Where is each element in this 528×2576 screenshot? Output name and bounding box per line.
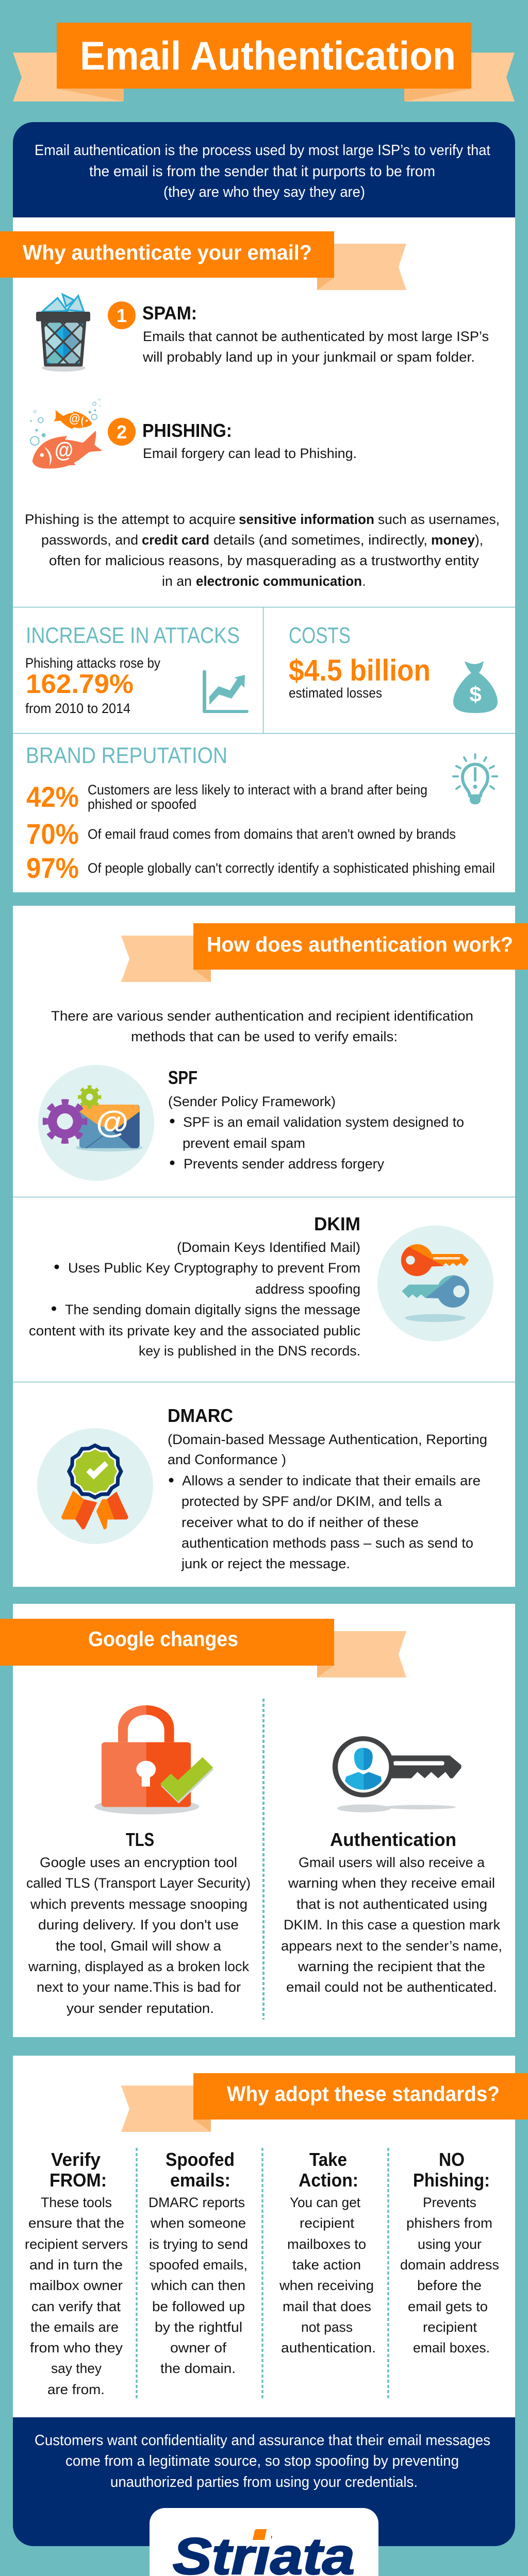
column: no phishing: phishers from bbox=[406, 2215, 492, 2231]
item: phishing bbox=[108, 418, 357, 461]
column: spoofed emails: Spoofed bbox=[166, 2149, 235, 2170]
stat: increase in attacks: 162.79% bbox=[26, 669, 134, 699]
panel: how does authentication work bbox=[13, 906, 528, 1587]
column: no phishing: Phishing: bbox=[413, 2170, 490, 2191]
item: spam: Emails that cannot be authenticated by most large ISP’s bbox=[143, 329, 489, 344]
block: SPF: (Sender Policy Framework) bbox=[168, 1094, 336, 1109]
footer banner with website bbox=[13, 2508, 515, 2576]
block: SPF: SPF is an email validation system designed to bbox=[183, 1114, 464, 1130]
stat: 97 percent bbox=[26, 852, 495, 884]
text: phishing explanation: details (and sometimes, indirectly, bbox=[213, 532, 427, 548]
item: spam: 1 bbox=[117, 305, 127, 326]
block: DKIM: content with its private key and the associated public bbox=[29, 1323, 360, 1338]
panel: why adopt these standards bbox=[13, 2056, 528, 2417]
item: phishing: PHISHING: bbox=[142, 420, 232, 441]
icon: trash bin bbox=[36, 293, 90, 372]
panel: why authenticate your email bbox=[0, 217, 515, 892]
block: Authentication: Authentication bbox=[330, 1829, 456, 1850]
column: verify from: mailbox owner bbox=[29, 2278, 123, 2293]
stat: increase in attacks: Phishing attacks rose by bbox=[25, 655, 160, 671]
block: Authentication: Gmail users will also receive a bbox=[299, 1855, 485, 1870]
text: phishing explanation: often for malicious reasons, by masquerading as a trustworthy entity bbox=[49, 553, 479, 568]
column: verify from: Verify bbox=[51, 2149, 101, 2170]
column: spoofed emails: which can then bbox=[151, 2278, 245, 2293]
block: Authentication: that is not authenticated using bbox=[296, 1896, 487, 1912]
heading: google changes: Google changes bbox=[88, 1627, 238, 1651]
column: take action: authentication. bbox=[281, 2340, 376, 2355]
block: DMARC: protected by SPF and/or DKIM, and tells a bbox=[182, 1494, 442, 1509]
block: DMARC: junk or reject the message. bbox=[181, 1556, 350, 1571]
block: DKIM: address spoofing bbox=[255, 1281, 360, 1297]
column: take action: when receiving bbox=[279, 2278, 374, 2293]
column: take action: Take bbox=[309, 2149, 347, 2170]
heading: how does authentication work bbox=[121, 923, 528, 982]
column: verify from: say they bbox=[51, 2361, 102, 2376]
heading: why authenticate: Why authenticate your email? bbox=[23, 241, 312, 264]
icon: phishing fish bbox=[30, 399, 102, 468]
stat: 97 percent: Of people globally can't correctly identify a sophisticated phishing email bbox=[88, 860, 495, 876]
text: phishing explanation: such as usernames, bbox=[378, 512, 500, 527]
stat: costs bbox=[289, 623, 431, 701]
block: Authentication: email could not be authenticated. bbox=[286, 1979, 497, 1995]
block: Authentication: appears next to the sender’s name, bbox=[281, 1938, 502, 1954]
block: DMARC bbox=[168, 1405, 487, 1571]
panel: closing statement bbox=[13, 2417, 515, 2546]
stat: costs: COSTS bbox=[289, 623, 351, 648]
column: verify from: recipient servers bbox=[25, 2236, 128, 2252]
stat: 42 percent: phished or spoofed bbox=[88, 796, 196, 812]
stat: increase in attacks: from 2010 to 2014 bbox=[25, 701, 130, 716]
panel: closing statement: Customers want confidentiality and assurance that their email messages bbox=[35, 2432, 490, 2449]
panel: closing statement: unauthorized parties from using your credentials. bbox=[110, 2474, 418, 2490]
panel: intro definition: Email authentication is the process used by most large ISP’s to verify that bbox=[35, 142, 490, 159]
block: TLS: called TLS (Transport Layer Security) bbox=[26, 1875, 251, 1891]
heading: google changes bbox=[0, 1619, 406, 1677]
block: DMARC: DMARC bbox=[168, 1405, 233, 1426]
column: spoofed emails: owner of bbox=[170, 2340, 227, 2355]
column: spoofed emails: by the rightful bbox=[155, 2319, 242, 2335]
block: DKIM: Uses Public Key Cryptography to prevent From bbox=[68, 1260, 360, 1276]
block: DKIM bbox=[29, 1213, 360, 1359]
icon: padlock with check bbox=[94, 1705, 213, 1815]
text: methods intro bbox=[51, 1008, 473, 1044]
column: no phishing: NO bbox=[439, 2149, 465, 2170]
icon: money bag bbox=[453, 661, 498, 713]
block: SPF bbox=[168, 1067, 464, 1172]
icon: envelope with gears bbox=[38, 1065, 154, 1181]
block: SPF: SPF bbox=[168, 1067, 197, 1088]
column: spoofed emails: emails: bbox=[170, 2170, 230, 2191]
stat: 97 percent: 97% bbox=[26, 852, 79, 884]
block: Authentication: warning when they receive email bbox=[288, 1875, 495, 1891]
text: phishing explanation: passwords, and bbox=[41, 532, 138, 548]
column: spoofed emails: spoofed emails, bbox=[149, 2257, 248, 2273]
block: DKIM: (Domain Keys Identified Mail) bbox=[177, 1240, 360, 1255]
stat: 42 percent: Customers are less likely to interact with a brand after being bbox=[88, 782, 427, 798]
column: spoofed emails: when someone bbox=[150, 2215, 246, 2231]
icon: lightbulb bbox=[453, 754, 497, 804]
column: take action: recipient bbox=[300, 2215, 355, 2231]
icon: phishing fish: @ bbox=[55, 437, 73, 462]
item: phishing: 2 bbox=[117, 421, 127, 443]
text: phishing explanation bbox=[25, 512, 500, 589]
stat: costs: $4.5 billion bbox=[289, 654, 431, 687]
column: verify from: ensure that the bbox=[28, 2215, 124, 2231]
text: phishing explanation: ), bbox=[475, 532, 483, 548]
panel: intro definition bbox=[13, 122, 515, 217]
block: TLS bbox=[26, 1829, 251, 2016]
column: take action: not pass bbox=[301, 2319, 353, 2335]
block: TLS: the tool, Gmail will show a bbox=[56, 1938, 222, 1954]
block: Authentication bbox=[281, 1829, 502, 1995]
column: take action: mail that does bbox=[283, 2299, 371, 2314]
block: TLS: your sender reputation. bbox=[67, 2001, 214, 2016]
heading: why authenticate bbox=[0, 231, 406, 290]
column: verify from: FROM: bbox=[50, 2170, 107, 2191]
block: DKIM: key is published in the DNS records. bbox=[139, 1343, 360, 1359]
column: take action bbox=[279, 2149, 376, 2355]
column: verify from: from who they bbox=[30, 2340, 123, 2355]
logo: Striata bbox=[150, 2508, 378, 2576]
column: spoofed emails: is trying to send bbox=[149, 2236, 248, 2252]
text: phishing explanation: . bbox=[362, 573, 366, 589]
block: DMARC: authentication methods pass – such as send to bbox=[182, 1535, 473, 1551]
block: TLS: which prevents message snooping bbox=[30, 1896, 248, 1912]
text: phishing explanation: credit card bbox=[142, 532, 209, 548]
column: spoofed emails: the domain. bbox=[160, 2361, 236, 2376]
block: DMARC: receiver what to do if neither of these bbox=[182, 1515, 419, 1530]
column: take action: You can get bbox=[290, 2195, 360, 2210]
text: phishing explanation: sensitive information bbox=[239, 512, 374, 527]
stat: 70 percent: 70% bbox=[26, 818, 79, 850]
block: DMARC: (Domain-based Message Authentication, Reporting bbox=[168, 1432, 487, 1447]
heading: how does authentication work: How does authentication work? bbox=[207, 933, 513, 956]
title banner: Email Authentication bbox=[80, 33, 456, 78]
heading: why adopt these standards: Why adopt these standards? bbox=[227, 2082, 500, 2106]
column: take action: take action bbox=[292, 2257, 361, 2273]
column: verify from: and in turn the bbox=[29, 2257, 123, 2273]
block: Authentication: DKIM. In this case a question mark bbox=[284, 1917, 501, 1933]
stat: increase in attacks bbox=[25, 623, 240, 716]
stat: 42 percent: 42% bbox=[26, 781, 79, 813]
block: TLS: next to your name.This is bad for bbox=[37, 1979, 241, 1995]
stat: 70 percent: Of email fraud comes from domains that aren't owned by brands bbox=[88, 826, 456, 842]
heading: why adopt these standards bbox=[121, 2073, 528, 2132]
title banner bbox=[13, 23, 515, 101]
block: DMARC: Allows a sender to indicate that their emails are bbox=[182, 1473, 481, 1488]
panel: closing statement: come from a legitimate source, so stop spoofing by preventing bbox=[65, 2453, 459, 2469]
block: TLS: during delivery. If you don't use bbox=[38, 1917, 239, 1933]
icon: rising chart bbox=[203, 670, 249, 713]
column: no phishing bbox=[400, 2149, 499, 2355]
column: verify from: can verify that bbox=[31, 2299, 121, 2314]
stat: costs: estimated losses bbox=[289, 685, 382, 701]
column: verify from: These tools bbox=[41, 2195, 112, 2210]
text: phishing explanation: money bbox=[431, 532, 475, 548]
column: spoofed emails: be followed up bbox=[152, 2299, 245, 2314]
block: SPF: prevent email spam bbox=[183, 1136, 305, 1151]
icon: two keys bbox=[377, 1225, 493, 1342]
stat: increase in attacks: INCREASE IN ATTACKS bbox=[26, 623, 240, 648]
block: SPF: Prevents sender address forgery bbox=[184, 1156, 384, 1172]
stat: 42 percent bbox=[26, 781, 427, 813]
item: spam: will probably land up in your junkmail or spam folder. bbox=[142, 349, 475, 365]
panel: intro definition: the email is from the sender that it purports to be from bbox=[89, 163, 435, 180]
block: DMARC: and Conformance ) bbox=[168, 1452, 286, 1467]
column: verify from: the emails are bbox=[30, 2319, 119, 2335]
block: TLS: Google uses an encryption tool bbox=[40, 1855, 237, 1870]
column: verify from: are from. bbox=[47, 2382, 105, 2397]
column: no phishing: email boxes. bbox=[413, 2340, 490, 2355]
block: DKIM: The sending domain digitally signs the message bbox=[65, 1302, 360, 1317]
column: spoofed emails: DMARC reports bbox=[148, 2195, 245, 2210]
icon: money bag: $ bbox=[469, 682, 482, 706]
icon: phishing fish: @ bbox=[69, 412, 80, 426]
icon: rosette badge bbox=[37, 1428, 153, 1544]
text: phishing explanation: Phishing is the attempt to acquire bbox=[25, 512, 236, 527]
column: no phishing: email gets to bbox=[408, 2299, 488, 2314]
icon: key with user bbox=[333, 1736, 461, 1812]
item: spam: SPAM: bbox=[142, 302, 197, 324]
block: TLS: warning, displayed as a broken lock bbox=[28, 1959, 249, 1974]
column: verify from bbox=[25, 2149, 128, 2397]
column: take action: Action: bbox=[299, 2170, 358, 2191]
icon: envelope with gears: @ bbox=[95, 1105, 128, 1140]
panel: intro definition: (they are who they say they are) bbox=[163, 184, 365, 200]
item: spam bbox=[108, 301, 489, 365]
heading: brand reputation: BRAND REPUTATION bbox=[26, 743, 227, 768]
column: no phishing: recipient bbox=[423, 2319, 477, 2335]
item: phishing: Email forgery can lead to Phishing. bbox=[143, 446, 357, 461]
panel: google changes bbox=[0, 1604, 515, 2037]
block: DKIM: DKIM bbox=[314, 1213, 360, 1234]
text: phishing explanation: in an bbox=[162, 573, 192, 589]
text: phishing explanation: electronic communication bbox=[196, 573, 362, 589]
column: spoofed emails bbox=[148, 2149, 248, 2376]
column: take action: mailboxes to bbox=[287, 2236, 366, 2252]
column: no phishing: using your bbox=[418, 2236, 482, 2252]
text: methods intro: methods that can be used to verify emails: bbox=[131, 1029, 398, 1044]
stat: 70 percent bbox=[26, 818, 456, 850]
column: no phishing: Prevents bbox=[423, 2195, 476, 2210]
block: Authentication: warning the recipient that the bbox=[298, 1959, 485, 1974]
column: no phishing: domain address bbox=[400, 2257, 499, 2273]
block: TLS: TLS bbox=[126, 1829, 154, 1850]
text: methods intro: There are various sender authentication and recipient identification bbox=[51, 1008, 473, 1024]
column: no phishing: before the bbox=[417, 2278, 482, 2293]
